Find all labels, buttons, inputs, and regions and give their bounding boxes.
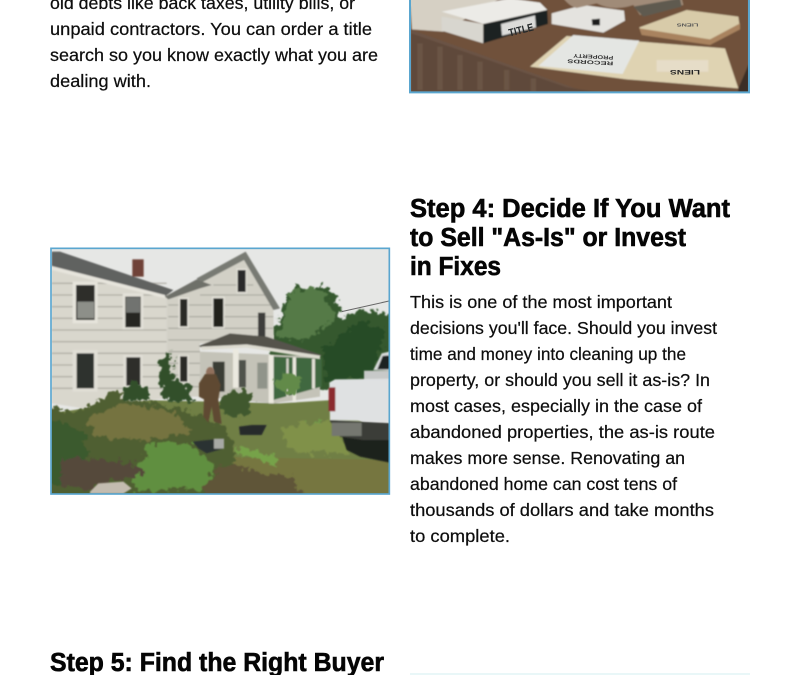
open folder — [530, 36, 738, 88]
right folders — [639, 10, 740, 44]
text block: step 4 body: makes more sense. Renovating an — [410, 448, 685, 468]
porch — [200, 352, 320, 403]
black bags — [239, 425, 267, 435]
stack of papers — [552, 5, 625, 33]
ground — [59, 399, 381, 461]
person — [206, 367, 215, 378]
image: title documents on a desk: TITLE — [507, 22, 535, 39]
text block: step 3 continuation: search so you know exactly what you are — [50, 45, 378, 65]
text block: step 4 body: thousands of dollars and take months — [410, 500, 714, 520]
image: title documents on a desk: PROPERTY — [573, 52, 613, 60]
binder — [442, 0, 547, 24]
text block: step 4 body: This is one of the most important — [410, 292, 672, 312]
text block: step 4 body: property, or should you sell it as-is? In — [410, 370, 710, 390]
heading: step 4: in Fixes — [410, 253, 501, 281]
text block: step 4 body: to complete. — [410, 526, 510, 546]
overgrown brush — [52, 349, 350, 494]
text block: step 4 body — [410, 292, 717, 546]
text block: step 3 continuation — [50, 0, 378, 91]
heading: step 4: to Sell "As-Is" or Invest — [410, 224, 686, 252]
trees — [270, 282, 393, 390]
left wing siding — [52, 268, 167, 408]
left roof — [52, 252, 173, 297]
image: title documents on a desk: LIENS — [677, 22, 698, 27]
text block: step 4 body: time and money into cleaning up the — [410, 344, 686, 364]
image: title documents on a desk — [410, 0, 749, 93]
chimney — [132, 259, 144, 277]
windows — [73, 282, 98, 323]
text block: step 3 continuation: dealing with. — [50, 71, 151, 91]
heading: step 4: Step 4: Decide If You Want — [410, 195, 731, 223]
gable wing — [167, 255, 274, 397]
truck — [342, 435, 393, 463]
image: title documents on a desk: RECORDS — [566, 57, 613, 66]
text block: step 3 continuation: unpaid contractors. You can order a title — [50, 19, 372, 39]
image: abandoned white farmhouse with overgrown yard and pickup truck — [47, 248, 393, 498]
heading: step 4 — [410, 195, 731, 281]
text block: step 4 body: most cases, especially in the case of — [410, 396, 702, 416]
image: top edge of step 5 picture — [410, 673, 750, 675]
text block: step 4 body: abandoned properties, the as-is route — [410, 422, 715, 442]
image: title documents on a desk: LIENS — [669, 68, 700, 75]
text block: step 4 body: decisions you'll face. Should you invest — [410, 318, 717, 338]
text block: step 4 body: abandoned home can cost tens of — [410, 474, 677, 494]
